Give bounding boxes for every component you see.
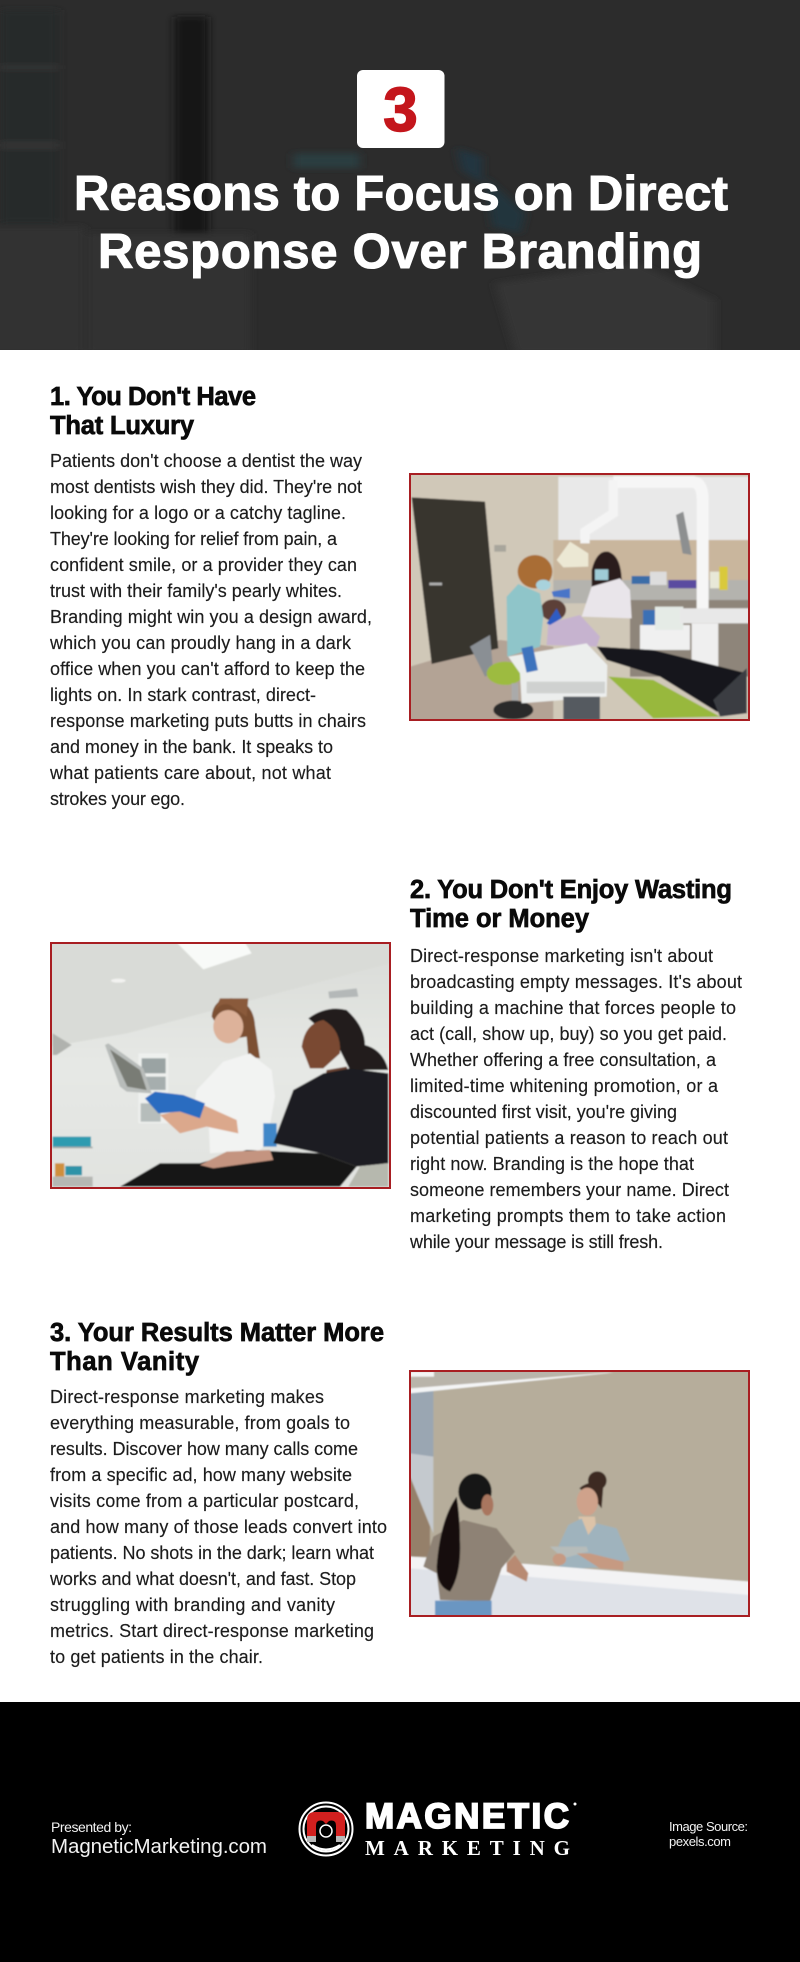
body text 3: visits come from a particular postcard, [50, 1491, 359, 1511]
body text 3: works and what doesn't, and fast. Stop [49, 1569, 356, 1589]
body text 1: confident smile, or a provider they can [50, 555, 357, 575]
section 2 text [409, 876, 742, 1252]
registered mark [574, 1802, 576, 1806]
heading 1: 1. You Don't Have [50, 383, 256, 411]
body text 2: Direct-response marketing isn't about [410, 946, 713, 966]
patient [263, 1123, 277, 1147]
dentist 2 [592, 552, 622, 590]
body text 2: act (call, show up, buy) so you get paid. [410, 1024, 727, 1044]
body text 3: everything measurable, from goals to [50, 1413, 350, 1433]
title: Reasons to Focus on Direct [74, 167, 728, 221]
title: Response Over Branding [98, 225, 702, 279]
counter [411, 1568, 748, 1615]
body text 3: to get patients in the chair. [50, 1647, 263, 1667]
body text 2: discounted first visit, you're giving [410, 1102, 677, 1122]
body text 1: Branding might win you a design award, [50, 607, 372, 627]
photo 3: reception desk [409, 1370, 750, 1617]
body text 3: patients. No shots in the dark; learn what [50, 1543, 374, 1563]
body text 1: strokes your ego. [50, 789, 185, 809]
wordmark subline: MARKETING [365, 1836, 570, 1860]
body text 1: lights on. In stark contrast, direct- [50, 685, 316, 705]
patient [423, 1520, 515, 1602]
body text 1: response marketing puts butts in chairs [50, 711, 366, 731]
body text 2: Whether offering a free consultation, a [410, 1050, 717, 1070]
body text 3: results. Discover how many calls come [50, 1439, 358, 1459]
dental arm [613, 482, 703, 610]
patient [541, 599, 566, 621]
heading 3 [50, 1319, 384, 1376]
header banner [0, 0, 800, 353]
icon: magnet in concentric rings [300, 1802, 352, 1856]
body text 2: potential patients a reason to reach out [410, 1128, 728, 1148]
heading 3: Than Vanity [50, 1348, 200, 1376]
heading 1 [50, 383, 256, 440]
body text 2: limited-time whitening promotion, or a [410, 1076, 719, 1096]
body text 1: which you can proudly hang in a dark [49, 633, 352, 653]
body text 3: metrics. Start direct-response marketing [50, 1621, 374, 1641]
body text 2: someone remembers your name. Direct [410, 1180, 729, 1200]
section 1 text [49, 383, 372, 809]
presented by [51, 1819, 267, 1858]
body text 3: Direct-response marketing makes [50, 1387, 324, 1407]
header background photo [0, 0, 800, 353]
dentist [588, 1471, 607, 1490]
body text 2: building a machine that forces people to [410, 998, 736, 1018]
body text 1: trust with their family's pearly whites. [50, 581, 342, 601]
tablet [105, 1043, 152, 1093]
stool [487, 662, 523, 685]
body text 3: from a specific ad, how many website [50, 1465, 352, 1485]
body text 1: looking for a logo or a catchy tagline. [50, 503, 346, 523]
body text 3: struggling with branding and vanity [50, 1595, 335, 1615]
presented by: Presented by: [51, 1819, 132, 1835]
body text 1: and money in the bank. It speaks to [50, 737, 333, 757]
body text 1: office when you can't afford to keep the [50, 659, 365, 679]
magnetic marketing logo [300, 1797, 576, 1860]
body text 3: and how many of those leads convert into [50, 1517, 387, 1537]
tray [508, 643, 607, 703]
section 3 text [49, 1319, 387, 1667]
body text 2: broadcasting empty messages. It's about [410, 972, 742, 992]
heading 3: 3. Your Results Matter More [50, 1319, 384, 1347]
unit [692, 623, 718, 677]
body text 1: Patients don't choose a dentist the way [50, 451, 362, 471]
image source: pexels.com [669, 1834, 731, 1849]
image source [669, 1819, 748, 1849]
image source: Image Source: [669, 1819, 748, 1834]
dentist [212, 998, 260, 1058]
body text 2: right now. Branding is the hope that [410, 1154, 694, 1174]
body text 2: marketing prompts them to take action [410, 1206, 726, 1226]
title [74, 167, 728, 279]
body text 2 [409, 946, 742, 1252]
badge with number 3 [357, 70, 444, 148]
dentist 1 [518, 555, 552, 588]
heading 2 [410, 876, 732, 933]
body text 2: while your message is still fresh. [409, 1232, 663, 1252]
body text 1 [49, 451, 372, 809]
presented by: MagneticMarketing.com [51, 1835, 267, 1858]
photo 2: dentist showing tablet to patient [50, 942, 391, 1189]
body text 1: They're looking for relief from pain, a [50, 529, 338, 549]
heading 2: Time or Money [410, 905, 590, 933]
photo 1: dental treatment room [409, 473, 750, 721]
heading 1: That Luxury [50, 412, 195, 440]
footer [0, 1702, 800, 1962]
wordmark: MAGNETIC [365, 1797, 569, 1836]
body text 1: most dentists wish they did. They're not [50, 477, 362, 497]
heading 2: 2. You Don't Enjoy Wasting [410, 876, 732, 904]
body text 3 [49, 1387, 387, 1667]
badge with number 3: 3 [383, 76, 418, 145]
body text 1: what patients care about, not what [49, 763, 331, 783]
